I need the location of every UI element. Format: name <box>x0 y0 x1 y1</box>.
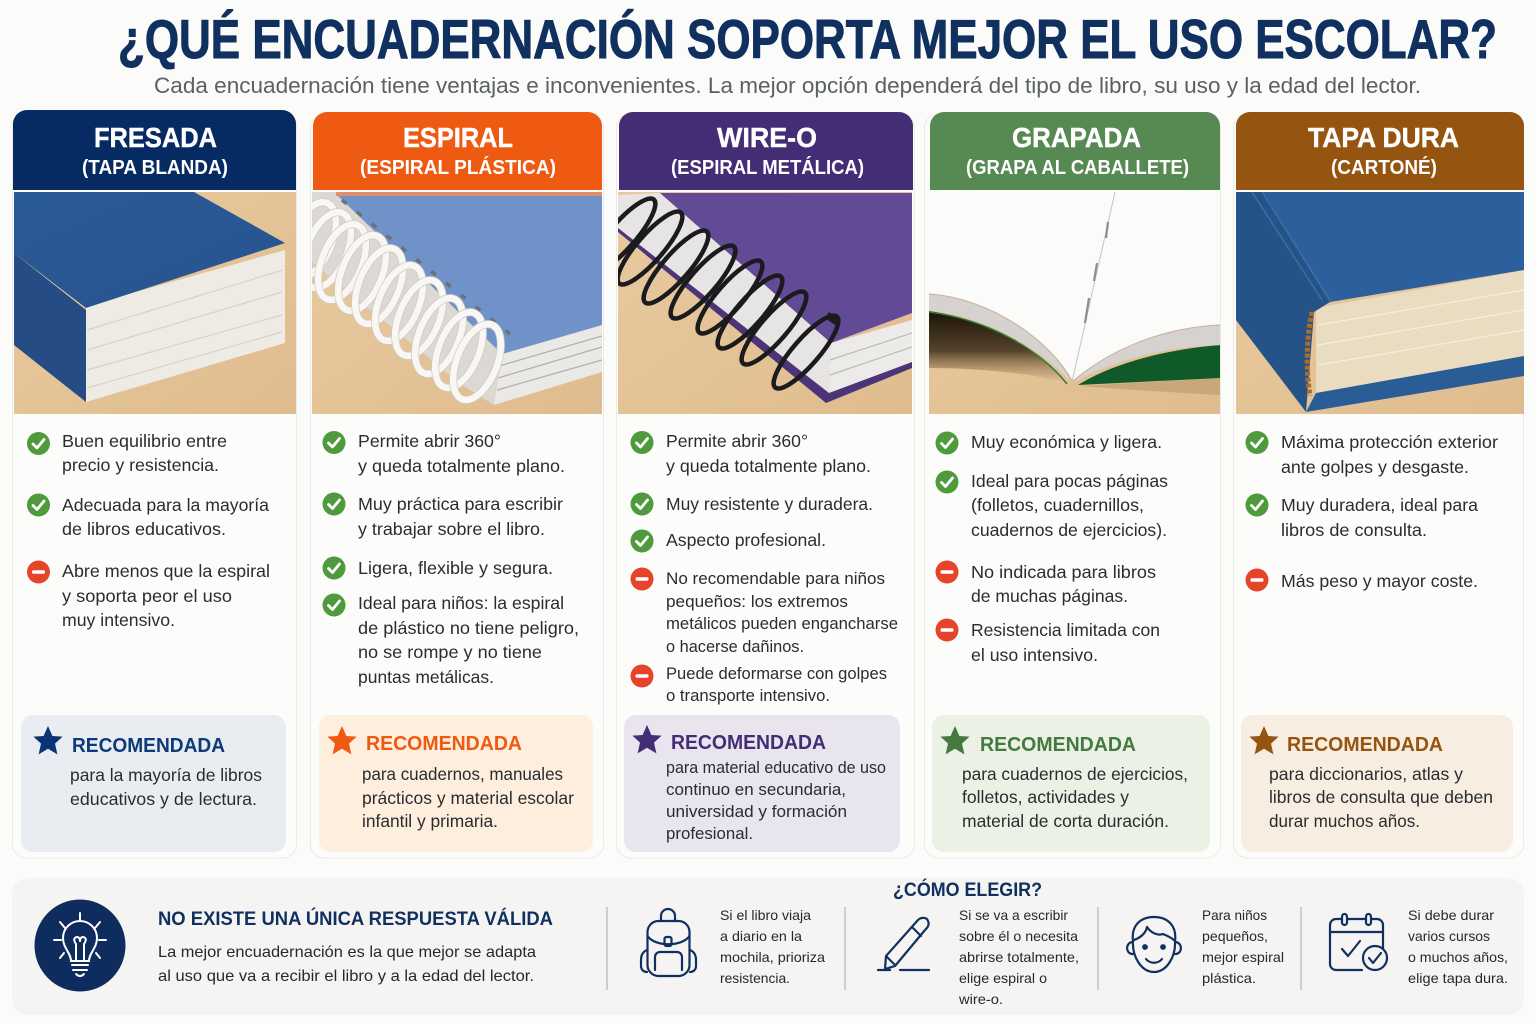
text: mochila advice: mochila, prioriza <box>720 949 825 965</box>
icon: calendar with check <box>1330 914 1387 970</box>
list: espiral pros: Ideal para niños: la espiral <box>358 593 564 613</box>
list: fresada pros and cons: precio y resistencia. <box>62 455 219 475</box>
text: escribir advice: abrirse totalmente, <box>959 949 1079 965</box>
heading: no existe una única respuesta válida: NO EXISTE UNA ÚNICA RESPUESTA VÁLIDA <box>158 906 553 930</box>
callout: recomendada espiral: prácticos y material escolar <box>362 788 574 808</box>
callout: recomendada espiral <box>319 715 593 852</box>
header: wire-o <box>619 112 913 190</box>
header: fresada: FRESADA <box>94 122 217 153</box>
list: fresada pros and cons: de libros educativos. <box>62 519 226 539</box>
photo: fresada paperback book <box>14 192 296 414</box>
list: espiral pros: puntas metálicas. <box>358 667 494 687</box>
text: niños advice: plástica. <box>1202 970 1256 986</box>
photo: plastic spiral notebook <box>312 192 602 414</box>
list: espiral pros <box>322 431 579 687</box>
list: espiral pros: Ligera, flexible y segura. <box>358 558 553 578</box>
icon: backpack <box>641 909 696 976</box>
photo: stapled booklet <box>929 192 1220 414</box>
list: fresada pros and cons: y soporta peor el uso <box>62 586 232 606</box>
callout: recomendada fresada: para la mayoría de libros <box>70 765 262 785</box>
header: tapa dura: TAPA DURA <box>1308 122 1459 153</box>
header: tapa dura <box>1236 112 1524 190</box>
list: grapada pros and cons: el uso intensivo. <box>971 645 1098 665</box>
list: wire-o pros and cons: o transporte intensivo. <box>666 687 830 705</box>
callout: recomendada espiral: infantil y primaria. <box>362 811 498 831</box>
panel: wire-o <box>582 112 914 858</box>
text: tapa dura advice: Si debe durar <box>1408 907 1494 923</box>
list: wire-o pros and cons: y queda totalmente plano. <box>666 456 871 476</box>
text: mochila advice: Si el libro viaja <box>720 907 811 923</box>
list: fresada pros and cons: Buen equilibrio entre <box>62 431 227 451</box>
callout: recomendada grapada <box>932 715 1210 852</box>
callout: recomendada espiral: para cuadernos, manuales <box>362 764 563 784</box>
heading: cómo elegir: ¿CÓMO ELEGIR? <box>893 877 1042 901</box>
text: escribir advice: wire-o. <box>958 991 1003 1007</box>
list: grapada pros and cons: cuadernos de ejercicios). <box>971 520 1167 540</box>
callout: recomendada espiral: RECOMENDADA <box>366 733 522 755</box>
text: niños advice <box>1202 907 1284 986</box>
list: wire-o pros and cons: Muy resistente y duradera. <box>666 494 873 514</box>
text: conclusion: al uso que va a recibir el libro y a la edad del lector. <box>158 968 534 985</box>
list: espiral pros: no se rompe y no tiene <box>358 642 542 662</box>
header: wire-o: WIRE-O <box>717 122 817 153</box>
panel: tapa dura <box>1234 112 1524 858</box>
list: espiral pros: Permite abrir 360° <box>358 431 501 451</box>
text: niños advice: pequeños, <box>1202 928 1268 944</box>
list: espiral pros: y queda totalmente plano. <box>358 456 565 476</box>
text: escribir advice: sobre él o necesita <box>959 928 1078 944</box>
photo: hardcover book <box>1236 192 1524 414</box>
callout: recomendada grapada: folletos, actividades y <box>962 787 1129 807</box>
list: grapada pros and cons: de muchas páginas. <box>971 586 1128 606</box>
text: conclusion <box>158 944 536 985</box>
text: escribir advice <box>958 907 1079 1007</box>
list: wire-o pros and cons: Puede deformarse con golpes <box>666 665 887 683</box>
panel: fresada <box>12 110 296 858</box>
panel: conclusion and guide <box>12 877 1524 1015</box>
icon: light bulb <box>34 900 126 992</box>
header: espiral <box>313 112 602 190</box>
callout: recomendada fresada: educativos y de lectura. <box>70 789 257 809</box>
list: wire-o pros and cons: Aspecto profesional. <box>666 530 826 550</box>
list: tapa dura pros and cons: Muy duradera, ideal para <box>1281 495 1478 515</box>
callout: recomendada tapa dura: durar muchos años. <box>1269 811 1420 831</box>
icon: pen <box>878 918 929 970</box>
callout: recomendada tapa dura: libros de consulta que deben <box>1269 787 1493 807</box>
header: grapada: (GRAPA AL CABALLETE) <box>966 157 1189 179</box>
header: espiral: (ESPIRAL PLÁSTICA) <box>360 156 556 179</box>
list: grapada pros and cons: Muy económica y ligera. <box>971 432 1162 452</box>
callout: recomendada grapada: RECOMENDADA <box>980 734 1136 756</box>
header: fresada <box>13 110 296 190</box>
list: grapada pros and cons <box>936 432 1168 665</box>
list: wire-o pros and cons: metálicos pueden engancharse <box>666 615 898 633</box>
list: fresada pros and cons: Adecuada para la mayoría <box>62 495 269 515</box>
callout: recomendada fresada: RECOMENDADA <box>72 735 225 757</box>
list: espiral pros: y trabajar sobre el libro. <box>358 519 545 539</box>
list: grapada pros and cons: Ideal para pocas páginas <box>971 471 1168 491</box>
list: tapa dura pros and cons: Máxima protección exterior <box>1281 432 1498 452</box>
text: mochila advice: resistencia. <box>720 970 790 986</box>
list: wire-o pros and cons: pequeños: los extremos <box>666 593 848 611</box>
subtitle: Cada encuadernación tiene ventajas e inconvenientes. La mejor opción dependerá del tipo de libro, su uso y la edad del lector. <box>154 73 1421 98</box>
list: tapa dura pros and cons <box>1246 431 1498 592</box>
callout: recomendada wire-o <box>624 715 900 852</box>
callout: recomendada tapa dura: para diccionarios, atlas y <box>1269 764 1463 784</box>
header: espiral: ESPIRAL <box>403 122 513 153</box>
list: grapada pros and cons: No indicada para libros <box>971 562 1156 582</box>
list: fresada pros and cons: muy intensivo. <box>62 610 175 630</box>
header: fresada: (TAPA BLANDA) <box>82 157 228 179</box>
list: espiral pros: Muy práctica para escribir <box>358 494 563 514</box>
text: mochila advice <box>720 907 825 986</box>
callout: recomendada wire-o: RECOMENDADA <box>671 732 826 754</box>
text: escribir advice: elige espiral o <box>959 970 1047 986</box>
list: fresada pros and cons <box>27 431 270 630</box>
list: tapa dura pros and cons: ante golpes y desgaste. <box>1281 457 1469 477</box>
list: wire-o pros and cons <box>630 431 898 705</box>
callout: recomendada tapa dura: RECOMENDADA <box>1287 734 1443 756</box>
list: tapa dura pros and cons: libros de consulta. <box>1281 520 1427 540</box>
text: niños advice: Para niños <box>1202 907 1267 923</box>
text: tapa dura advice: elige tapa dura. <box>1408 970 1508 986</box>
callout: recomendada wire-o: universidad y formación <box>666 803 847 821</box>
text: escribir advice: Si se va a escribir <box>959 907 1068 923</box>
text: niños advice: mejor espiral <box>1202 949 1284 965</box>
text: tapa dura advice <box>1408 907 1508 986</box>
photo: metal wire-o notebook <box>618 192 912 414</box>
text: mochila advice: a diario en la <box>720 928 802 944</box>
header: wire-o: (ESPIRAL METÁLICA) <box>671 156 864 179</box>
callout: recomendada fresada <box>21 715 286 852</box>
callout: recomendada grapada: material de corta duración. <box>962 811 1169 831</box>
callout: recomendada wire-o: profesional. <box>666 825 753 843</box>
callout: recomendada grapada: para cuadernos de ejercicios, <box>962 764 1188 784</box>
panel: espiral <box>278 112 604 858</box>
panel: grapada <box>924 112 1220 858</box>
list: espiral pros: de plástico no tiene peligro, <box>358 618 579 638</box>
header: tapa dura: (CARTONÉ) <box>1331 156 1437 179</box>
icon: child face <box>1127 917 1181 972</box>
list: grapada pros and cons: Resistencia limitada con <box>971 620 1160 640</box>
callout: recomendada wire-o: para material educativo de uso <box>666 759 886 777</box>
text: tapa dura advice: o muchos años, <box>1408 949 1508 965</box>
text: tapa dura advice: varios cursos <box>1408 928 1490 944</box>
list: grapada pros and cons: (folletos, cuadernillos, <box>971 495 1144 515</box>
list: tapa dura pros and cons: Más peso y mayor coste. <box>1281 571 1478 591</box>
text: conclusion: La mejor encuadernación es la que mejor se adapta <box>158 944 536 961</box>
header: grapada: GRAPADA <box>1012 122 1141 153</box>
header: grapada <box>930 112 1220 190</box>
list: wire-o pros and cons: No recomendable para niños <box>666 570 885 588</box>
list: wire-o pros and cons: o hacerse dañinos. <box>666 638 804 656</box>
list: wire-o pros and cons: Permite abrir 360° <box>666 431 808 451</box>
callout: recomendada tapa dura <box>1241 715 1513 852</box>
callout: recomendada wire-o: continuo en secundaria, <box>666 781 846 799</box>
list: fresada pros and cons: Abre menos que la espiral <box>62 561 270 581</box>
